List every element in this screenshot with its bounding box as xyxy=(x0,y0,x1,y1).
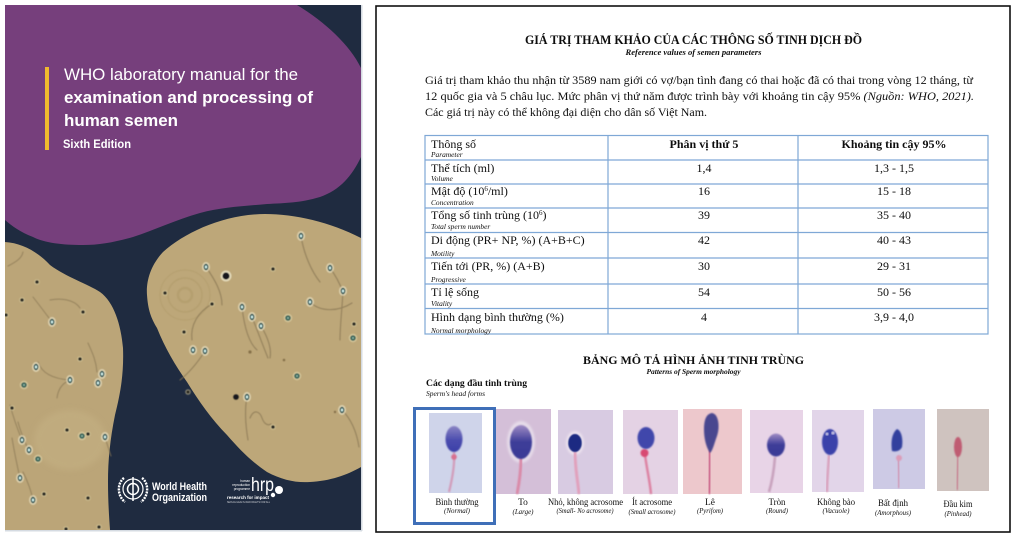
HRP logo: hrp xyxy=(251,475,274,496)
subheading: head forms xyxy=(426,378,527,398)
row: progressive: 30 xyxy=(698,259,710,273)
row: vitality: Tỉ lệ sống xyxy=(431,285,479,299)
row: progressive: 29 - 31 xyxy=(877,259,911,273)
row: concentration: Concentration xyxy=(431,198,474,207)
row: motility xyxy=(430,233,911,258)
row: normal morphology xyxy=(430,310,914,335)
row: concentration: 15 - 18 xyxy=(877,184,911,198)
photo captions: (Amorphous) xyxy=(875,509,912,517)
photo: amorphous xyxy=(873,409,925,489)
row: normal morphology: Normal morphology xyxy=(430,326,492,335)
row: total sperm number: Total sperm number xyxy=(431,222,490,231)
table header row xyxy=(430,137,947,159)
photo captions: Bất định xyxy=(878,498,908,509)
row: total sperm number: 39 xyxy=(698,208,710,222)
table header row: Khoảng tin cậy 95% xyxy=(841,137,947,151)
row: vitality: 54 xyxy=(698,285,710,299)
heading: reference values: Reference values of semen parameters xyxy=(624,48,762,57)
heading: reference values xyxy=(525,32,862,57)
photo: normal sperm xyxy=(429,413,482,493)
row: total sperm number xyxy=(431,208,911,231)
heading: sperm morphology xyxy=(583,353,804,376)
photo: pyriform xyxy=(683,409,742,494)
row: motility: 40 - 43 xyxy=(877,233,911,247)
row: total sperm number: 35 - 40 xyxy=(877,208,911,222)
cover accent bar xyxy=(45,67,49,150)
cover title: human semen xyxy=(64,111,178,130)
intro paragraph: Giá trị tham khảo thu nhận từ 3589 nam giới có vợ/bạn tình đang có thai hoặc đã có thai trong vòng 12 tháng, từ xyxy=(425,73,973,87)
row: volume: Thể tích (ml) xyxy=(431,161,494,175)
HRP logo: human xyxy=(240,479,250,483)
photo captions: (Round) xyxy=(766,507,789,515)
subheading: head forms: Sperm's head forms xyxy=(426,389,485,398)
photo captions: Ít acrosome xyxy=(632,496,672,508)
row: total sperm number: Tổng số tinh trùng (10 xyxy=(431,208,539,222)
intro paragraph: Các giá trị này có thể không đại diện cho dân số Việt Nam. xyxy=(425,105,707,119)
row: normal morphology: 3,9 - 4,0 xyxy=(874,310,914,324)
cover title: Sixth Edition xyxy=(63,137,131,151)
purple blob xyxy=(5,5,361,245)
photo captions: (Vacuole) xyxy=(822,507,850,515)
photo: round xyxy=(750,410,803,493)
table header row: Phân vị thứ 5 xyxy=(670,137,738,151)
row: vitality: 50 - 56 xyxy=(877,285,911,299)
row: concentration: /ml) xyxy=(488,184,508,198)
row: volume xyxy=(431,161,914,183)
photo captions: (Pinhead) xyxy=(944,510,972,518)
HRP logo: SEXUAL HEALTH AND RIGHTS FOR ALL xyxy=(227,500,270,504)
photo captions: Bình thường xyxy=(436,498,479,508)
heading: reference values: GIÁ TRỊ THAM KHẢO CỦA CÁC THÔNG SỐ TINH DỊCH ĐỒ xyxy=(525,32,862,47)
cover title: WHO laboratory manual for the xyxy=(64,66,298,84)
panel: WHO manual cover xyxy=(3,5,362,532)
photo: large head xyxy=(496,409,551,494)
row: concentration: Mật độ (10 xyxy=(431,184,484,198)
photo: small no acrosome xyxy=(558,410,613,494)
table: semen parameters xyxy=(425,136,988,335)
row: total sperm number: 6 xyxy=(539,209,543,217)
row: progressive xyxy=(430,259,911,284)
row: motility: Di động (PR+ NP, %) (A+B+C) xyxy=(431,233,585,247)
WHO logo xyxy=(119,477,207,504)
photo captions: Tròn xyxy=(768,498,786,508)
photo captions: Không bào xyxy=(817,498,855,508)
highlight frame: normal xyxy=(414,408,494,524)
intro paragraph xyxy=(425,73,974,119)
photo captions: (Pyrifom) xyxy=(697,507,724,515)
subheading: head forms: Các dạng đầu tinh trùng xyxy=(426,378,527,389)
table header row: Parameter xyxy=(430,150,463,159)
HRP logo xyxy=(227,475,283,504)
HRP logo: reproduction xyxy=(232,483,250,487)
photo: vacuole xyxy=(812,410,864,492)
row: motility: Motility xyxy=(430,249,455,258)
row: normal morphology: Hình dạng bình thường (%) xyxy=(431,310,564,324)
panel: reference values sheet xyxy=(376,6,1010,532)
row: concentration: 6 xyxy=(484,185,488,193)
intro paragraph: 12 quốc gia và 5 châu lục. Mức phân vị thứ năm được trình bày với khoảng tin cậy 95% (Nguồn: WHO, 2021). xyxy=(425,89,974,103)
row: vitality xyxy=(431,285,911,308)
photo captions: (Normal) xyxy=(444,507,471,515)
row: total sperm number: ) xyxy=(542,208,546,222)
HRP logo: programme xyxy=(234,487,250,491)
photo captions: Nhỏ, không acrosome xyxy=(548,498,623,508)
photo: small acrosome xyxy=(623,410,678,494)
row: vitality: Vitality xyxy=(431,299,453,308)
row: volume: 1,3 - 1,5 xyxy=(874,161,914,175)
cover title: examination and processing of xyxy=(64,88,313,107)
heading: sperm morphology: BẢNG MÔ TẢ HÌNH ẢNH TINH TRÙNG xyxy=(583,353,804,367)
row: concentration: 16 xyxy=(698,184,710,198)
row: volume: 1,4 xyxy=(696,161,712,175)
photo captions: (Large) xyxy=(512,508,534,516)
photo captions: (Small acrosome) xyxy=(628,508,676,516)
micrograph: left tan blob xyxy=(3,242,123,532)
row: concentration xyxy=(431,184,911,207)
WHO logo: World Health xyxy=(152,481,207,493)
cover title xyxy=(63,66,313,151)
photo captions: To xyxy=(518,498,528,508)
photo captions: Lê xyxy=(705,498,715,508)
WHO logo: Organization xyxy=(152,492,207,504)
HRP logo: research for impact xyxy=(227,495,269,500)
row: progressive: Tiến tới (PR, %) (A+B) xyxy=(431,259,545,273)
heading: sperm morphology: Patterns of Sperm morphology xyxy=(646,367,741,376)
photo captions: (Small- No acrosome) xyxy=(556,507,614,515)
table header row: Thông số xyxy=(431,137,476,151)
micrograph: right tan blob xyxy=(147,214,361,482)
photo captions: Đầu kim xyxy=(944,499,973,510)
row: progressive: Progressive xyxy=(430,275,466,284)
row: volume: Volume xyxy=(431,174,453,183)
photo captions xyxy=(436,496,973,518)
photo: pinhead xyxy=(937,409,989,491)
row: motility: 42 xyxy=(698,233,710,247)
row: normal morphology: 4 xyxy=(701,310,707,324)
